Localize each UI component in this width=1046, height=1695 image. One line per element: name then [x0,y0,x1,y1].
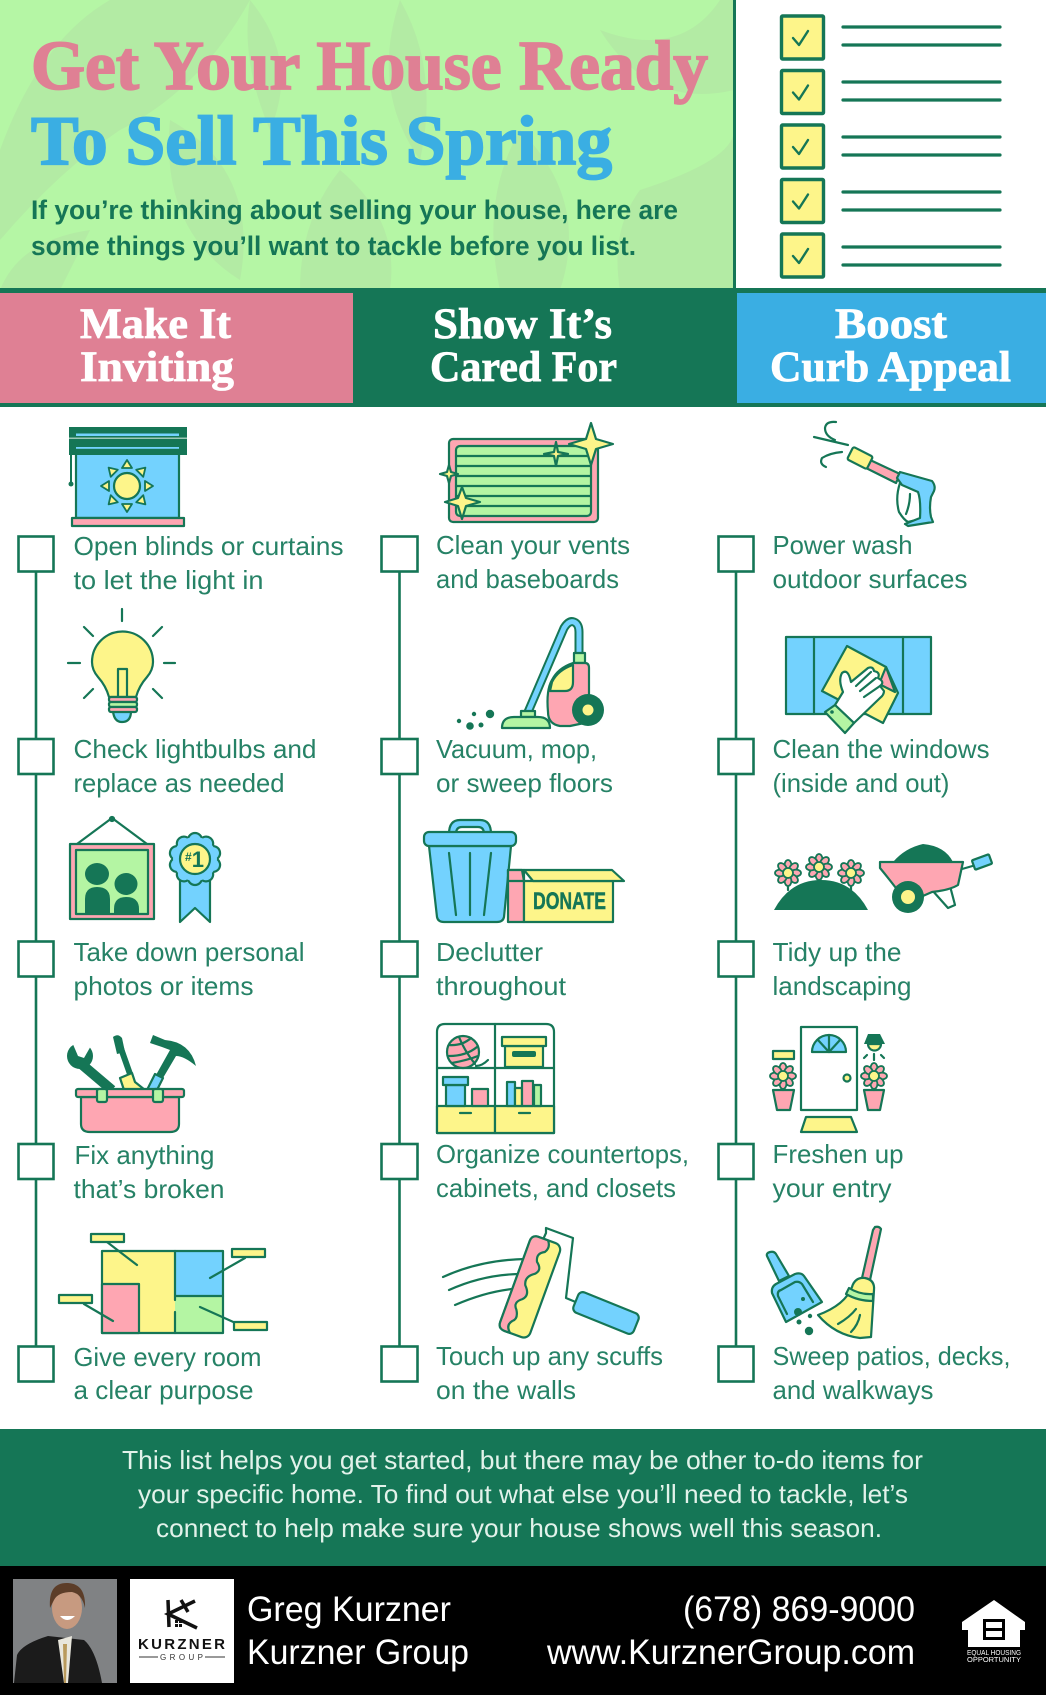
agent photo [13,1579,117,1683]
text: vacuum: or sweep floors [436,768,613,798]
icon: front door entry [770,1027,887,1132]
text: touch up [436,1341,663,1405]
icon: cleaning window [786,637,931,733]
icon: power washer [814,422,935,526]
text: power wash: outdoor surfaces [772,564,968,594]
text: power wash: Power wash [772,530,912,560]
text: lightbulbs [74,734,316,798]
text: landscaping: Tidy up the [772,937,902,967]
panel: column 3 Boost Curb Appeal [718,422,1010,1405]
text: vents [436,530,630,594]
title [31,28,708,180]
agent name: Kurzner Group [247,1633,469,1672]
text: open blinds: to let the light in [74,565,264,595]
header: Boost Curb Appeal: Curb Appeal [770,344,1011,391]
text: touch up: Touch up any scuffs [436,1341,663,1371]
icon: trash can and donate box: DONATE [533,888,606,915]
header: Boost Curb Appeal [737,293,1046,403]
icon: toolbox [67,1035,196,1132]
contact details: (678) 869-9000 [683,1590,915,1629]
text: clean windows: Clean the windows [772,734,990,764]
text: personal photos: photos or items [74,971,254,1001]
title: To Sell This Spring [31,103,612,180]
icon: dustpan and broom [767,1227,881,1338]
icon: vacuum cleaner [457,622,604,730]
contact details [546,1590,915,1672]
icon: clean vent [440,423,613,522]
text: personal photos: Take down personal [74,937,304,967]
checkboxes [718,536,754,1382]
text: declutter [436,937,567,1001]
text: power wash [772,530,968,594]
text: lightbulbs: replace as needed [74,768,284,798]
header: Boost Curb Appeal: Boost [835,301,948,348]
header: Show It's Cared For: Show It’s [433,301,612,348]
timeline [398,572,401,1346]
text: sweep [772,1341,1010,1405]
timeline [35,572,37,1346]
icon: checklist [733,0,1046,290]
panel: closing message: your specific home. To find out what else you’ll need to tackle, let’s [138,1479,908,1509]
text: sweep: and walkways [772,1375,934,1405]
text: fix anything: that’s broken [74,1174,224,1204]
text: entry: Freshen up [772,1139,904,1169]
text: clear purpose: Give every room [74,1342,262,1372]
icon: equal housing opportunity [962,1600,1025,1664]
icon: equal housing opportunity: EQUAL HOUSING [967,1648,1021,1657]
text: clear purpose: a clear purpose [74,1375,254,1405]
header: Make It Inviting: Inviting [80,344,235,391]
text: personal photos [74,937,304,1001]
text: vacuum: Vacuum, mop, [436,734,597,764]
checkboxes [382,536,418,1382]
icon: family photo and ribbon: 1 [192,847,204,872]
panel: closing message: connect to help make sure your house shows well this season. [156,1513,882,1543]
text: organize: cabinets, and closets [436,1173,676,1203]
text: vents: Clean your vents [436,530,630,560]
icon: family photo and ribbon [70,817,222,922]
intro text: If you’re thinking about selling your house, here are [31,195,678,225]
text: sweep: Sweep patios, decks, [772,1341,1010,1371]
header: Show It's Cared For [430,301,617,391]
intro text [31,195,678,261]
icon: window blind with sun [68,427,187,526]
panel: column headers [0,288,1046,407]
logo: Kurzner Group: GROUP [160,1653,203,1662]
contact details: www.KurznerGroup.com [546,1633,915,1672]
icon: organized shelves [437,1024,554,1133]
text: landscaping: landscaping [772,971,912,1001]
intro text: some things you’ll want to tackle before you list. [31,231,636,261]
text: touch up: on the walls [436,1375,576,1405]
agent name: Greg Kurzner [247,1590,451,1629]
icon: trash can and donate box [424,820,624,922]
text: organize: Organize countertops, [436,1139,689,1169]
text: open blinds: Open blinds or curtains [74,531,344,561]
icon: equal housing opportunity: OPPORTUNITY [967,1655,1021,1664]
header: Show It's Cared For: Cared For [430,344,617,391]
icon: floor plan [59,1234,267,1333]
panel: closing message [0,1429,1046,1566]
text: open blinds [74,531,344,595]
text: landscaping [772,937,912,1001]
logo: Kurzner Group [130,1579,234,1683]
text: entry: your entry [772,1173,892,1203]
text: organize [436,1139,689,1203]
panel: closing message: This list helps you get started, but there may be other to-do items for [122,1445,923,1475]
icon: paint roller [443,1228,640,1339]
header: Make It Inviting [0,293,353,403]
text: declutter: throughout [436,971,567,1001]
panel: column 2 Show It's Cared For [382,423,689,1405]
text: clean windows [772,734,990,798]
text: fix anything [74,1140,224,1204]
text: entry [772,1139,904,1203]
timeline [735,572,737,1346]
logo: Kurzner Group: KURZNER [138,1636,225,1653]
header: Make It Inviting: Make It [80,301,232,348]
text: clean windows: (inside and out) [772,768,950,798]
panel: title header [0,0,734,290]
text: vacuum [436,734,613,798]
icon: family photo and ribbon: # [185,850,192,864]
checkboxes [18,536,54,1382]
text: lightbulbs: Check lightbulbs and [74,734,316,764]
panel: agent footer [0,1566,1046,1695]
text: declutter: Declutter [436,937,543,967]
agent name [247,1590,469,1672]
title: Get Your House Ready [31,28,708,105]
text: vents: and baseboards [436,564,619,594]
text: fix anything: Fix anything [74,1140,214,1170]
icon: flowers and wheelbarrow [774,844,992,913]
panel: column 1 Make It Inviting [18,427,344,1405]
text: clear purpose [74,1342,262,1405]
icon: lightbulb [68,609,175,722]
